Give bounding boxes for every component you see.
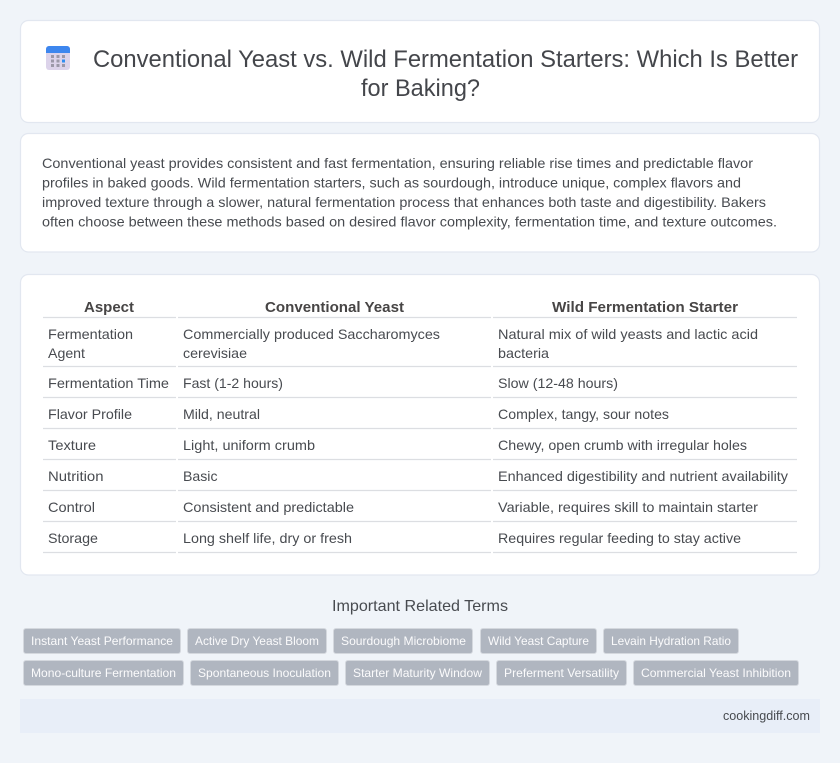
row: storage: Storage [48,530,98,546]
tag: sourdough microbiome [334,628,472,654]
tag: wild yeast capture: Wild Yeast Capture [488,634,589,648]
row: fermentation agent: Commercially produced Saccharomyces [183,326,440,342]
row: nutrition [43,468,797,490]
panel: header [20,20,820,122]
tag: commercial yeast inhibition: Commercial Yeast Inhibition [641,666,791,680]
row: fermentation agent: bacteria [498,345,549,361]
title [93,46,798,102]
title: Conventional Yeast vs. Wild Fermentation Starters: Which Is Better [93,46,798,73]
tag: mono-culture fermentation [24,660,184,686]
text block: summary: profiles in baked goods. Wild fermentation starters, such as sourdough, introduce unique, complex flavors and [42,174,741,190]
tag: wild yeast capture [480,628,596,654]
row: nutrition: Enhanced digestibility and nutrient availability [498,468,788,484]
tag: commercial yeast inhibition [634,660,798,686]
row: fermentation time: Fermentation Time [48,375,169,391]
footer: cookingdiff.com [723,709,810,723]
text block: summary: often choose between these methods based on desired flavor complexity, fermentation time, and texture outcomes. [42,214,777,230]
row: fermentation agent: Fermentation [48,326,133,342]
tag: instant yeast performance: Instant Yeast Performance [31,634,173,648]
title: for Baking? [361,75,480,102]
row: flavor profile [43,406,797,428]
text block: summary [42,155,777,230]
tag: instant yeast performance [24,628,180,654]
tag: sourdough microbiome: Sourdough Microbiome [341,634,466,648]
row: texture [43,437,797,460]
row: storage [43,530,797,552]
row: control: Consistent and predictable [183,499,354,515]
row: control [43,499,797,522]
icon: calendar [46,46,70,70]
text block: summary: Conventional yeast provides consistent and fast fermentation, ensuring reliable rise times and predictable flavor [42,155,753,171]
tag: mono-culture fermentation: Mono-culture Fermentation [31,666,176,680]
row: fermentation agent: Agent [48,345,85,361]
row: flavor profile: Flavor Profile [48,406,132,422]
row: storage: Requires regular feeding to stay active [498,530,741,546]
row: flavor profile: Complex, tangy, sour notes [498,406,669,422]
tags: related terms [24,628,798,686]
tag: preferment versatility [496,660,626,686]
row: storage: Long shelf life, dry or fresh [183,530,352,546]
tag: starter maturity window [346,660,490,686]
row: fermentation time: Slow (12-48 hours) [498,375,618,391]
tag: starter maturity window: Starter Maturity Window [353,666,482,680]
table header: Conventional Yeast [265,300,404,316]
table header [43,300,797,318]
row: fermentation agent: Natural mix of wild yeasts and lactic acid [498,326,758,342]
tag: levain hydration ratio [604,628,738,654]
panel: comparison table [20,274,820,575]
tag: spontaneous inoculation: Spontaneous Inoculation [198,666,331,680]
tag: active dry yeast bloom: Active Dry Yeast Bloom [195,634,319,648]
row: texture: Light, uniform crumb [183,437,315,453]
row: texture: Chewy, open crumb with irregular holes [498,437,747,453]
footer [20,699,820,733]
tag: spontaneous inoculation [190,660,338,686]
row: nutrition: Basic [183,468,218,484]
row: fermentation agent: cerevisiae [183,345,247,361]
tag: levain hydration ratio: Levain Hydration Ratio [611,634,731,648]
row: fermentation time: Fast (1-2 hours) [183,375,283,391]
table header: Wild Fermentation Starter [552,300,738,316]
panel: summary paragraph [20,134,820,252]
text block: summary: improved texture through a slower, natural fermentation process that enhances both taste and digestibility. Bakers [42,194,766,210]
row: texture: Texture [48,437,96,453]
row: fermentation agent [43,326,797,366]
row: nutrition: Nutrition [48,468,104,484]
row: fermentation time [43,375,797,398]
row: control: Variable, requires skill to maintain starter [498,499,758,515]
tag: preferment versatility: Preferment Versatility [504,666,619,680]
row: flavor profile: Mild, neutral [183,406,260,422]
heading: important related terms: Important Related Terms [332,598,508,615]
row: control: Control [48,499,95,515]
table header: Aspect [84,300,134,316]
tag: active dry yeast bloom [188,628,326,654]
